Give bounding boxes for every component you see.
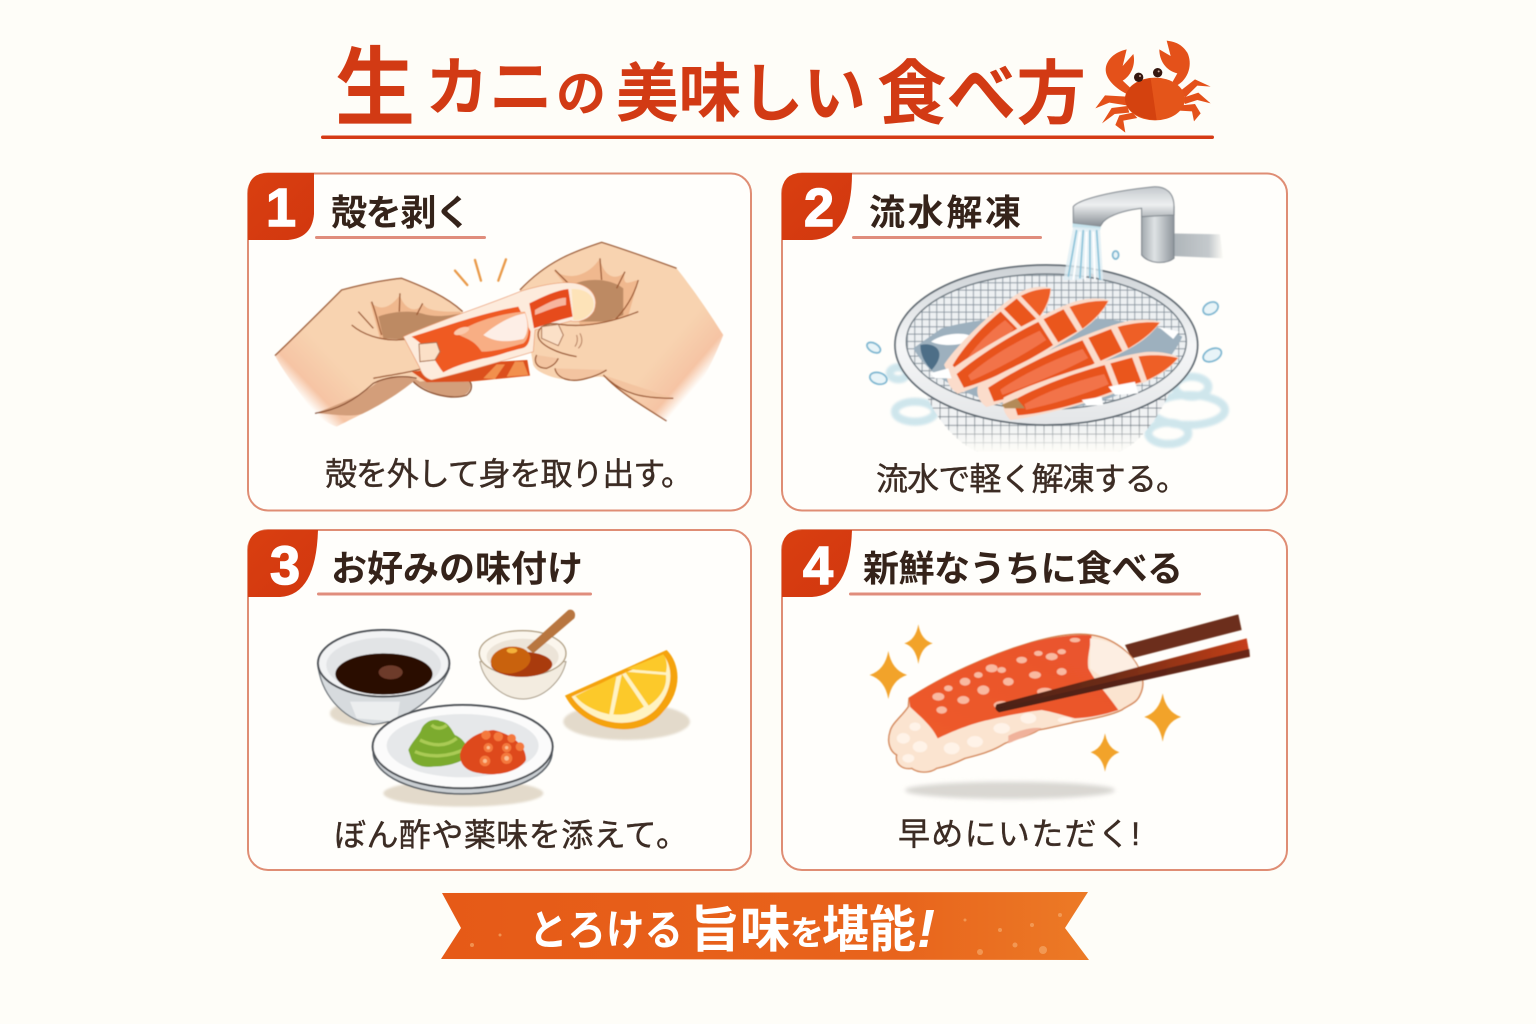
step 1 badge: 1 bbox=[266, 178, 296, 238]
title: 生 bbox=[335, 41, 415, 137]
step 4 heading rule bbox=[849, 592, 1201, 596]
table shadows bbox=[330, 701, 690, 807]
banner text: とろける bbox=[529, 907, 683, 954]
banner text bbox=[529, 899, 935, 959]
banner text: を bbox=[790, 915, 824, 953]
panel: step 3 seasoning bbox=[248, 530, 751, 870]
right hand bbox=[520, 242, 723, 421]
banner text: ! bbox=[917, 899, 935, 959]
running water bbox=[1063, 227, 1103, 282]
title: 食べ方 bbox=[877, 55, 1086, 133]
step 1 heading rule bbox=[315, 236, 486, 239]
illustration: hands peeling crab leg bbox=[275, 242, 723, 427]
wasabi bbox=[408, 720, 470, 767]
banner speckles bbox=[470, 913, 1062, 955]
banner text: 旨味 bbox=[690, 902, 790, 958]
panel: step 2 thaw under running water bbox=[782, 173, 1287, 510]
step 3 heading: お好みの味付け bbox=[331, 548, 583, 589]
step 1 description: 殻を外して身を取り出す。 bbox=[325, 456, 693, 492]
icon: crab bbox=[1095, 41, 1211, 133]
crab meat bbox=[889, 634, 1143, 772]
faucet bbox=[1073, 187, 1223, 262]
condiment plate bbox=[373, 705, 553, 794]
step 4 heading: 新鮮なうちに食べる bbox=[863, 548, 1183, 589]
step 2 description: 流水で軽く解凍する。 bbox=[876, 461, 1188, 497]
table shadow bbox=[905, 782, 1115, 799]
salmon roe bbox=[460, 730, 526, 774]
illustration: colander under faucet bbox=[865, 187, 1225, 452]
step 3 badge bbox=[248, 530, 318, 597]
step 3 badge: 3 bbox=[270, 536, 300, 596]
snap marks bbox=[455, 259, 506, 285]
title bbox=[335, 41, 1086, 137]
panel: step 4 eat while fresh bbox=[782, 530, 1287, 870]
step 2 heading rule bbox=[852, 236, 1042, 239]
title underline bbox=[321, 136, 1214, 139]
step 2 badge: 2 bbox=[804, 178, 834, 238]
step 4 description: 早めにいただく! bbox=[898, 816, 1140, 852]
step 2 heading: 流水解凍 bbox=[869, 192, 1021, 233]
step 3 heading rule bbox=[317, 592, 592, 596]
soy sauce bowl bbox=[318, 630, 449, 724]
banner bbox=[441, 892, 1089, 960]
front chopstick bbox=[995, 638, 1250, 712]
title: の bbox=[556, 66, 606, 122]
lemon wedge bbox=[565, 650, 677, 729]
illustration: condiments bbox=[318, 610, 690, 807]
legs under shell bbox=[412, 360, 530, 382]
step 4 badge: 4 bbox=[803, 536, 833, 596]
left hand bbox=[275, 278, 471, 427]
title: 美味しい bbox=[616, 58, 866, 130]
step 3 description: ぼん酢や薬味を添えて。 bbox=[334, 817, 688, 853]
panel: step 1 peel the shell bbox=[248, 173, 751, 510]
title: カニ bbox=[425, 52, 553, 124]
banner text: 堪能 bbox=[822, 902, 916, 958]
illustration: crab meat with chopsticks bbox=[870, 614, 1250, 799]
sparkles bbox=[870, 624, 1181, 772]
step 4 badge bbox=[782, 530, 852, 597]
back chopstick bbox=[1125, 614, 1242, 658]
sauce dish with spoon bbox=[479, 610, 575, 699]
colander rim and bowl bbox=[895, 265, 1198, 425]
thumbs bbox=[419, 312, 707, 421]
step 2 badge bbox=[782, 173, 852, 240]
water droplets bbox=[865, 251, 1224, 386]
step 1 heading: 殻を剥く bbox=[331, 192, 471, 233]
water splash bbox=[890, 367, 1225, 444]
crab legs in colander bbox=[930, 273, 1184, 426]
colander basket bbox=[925, 392, 1170, 452]
crab leg bbox=[403, 283, 596, 380]
step 1 badge bbox=[248, 173, 314, 240]
